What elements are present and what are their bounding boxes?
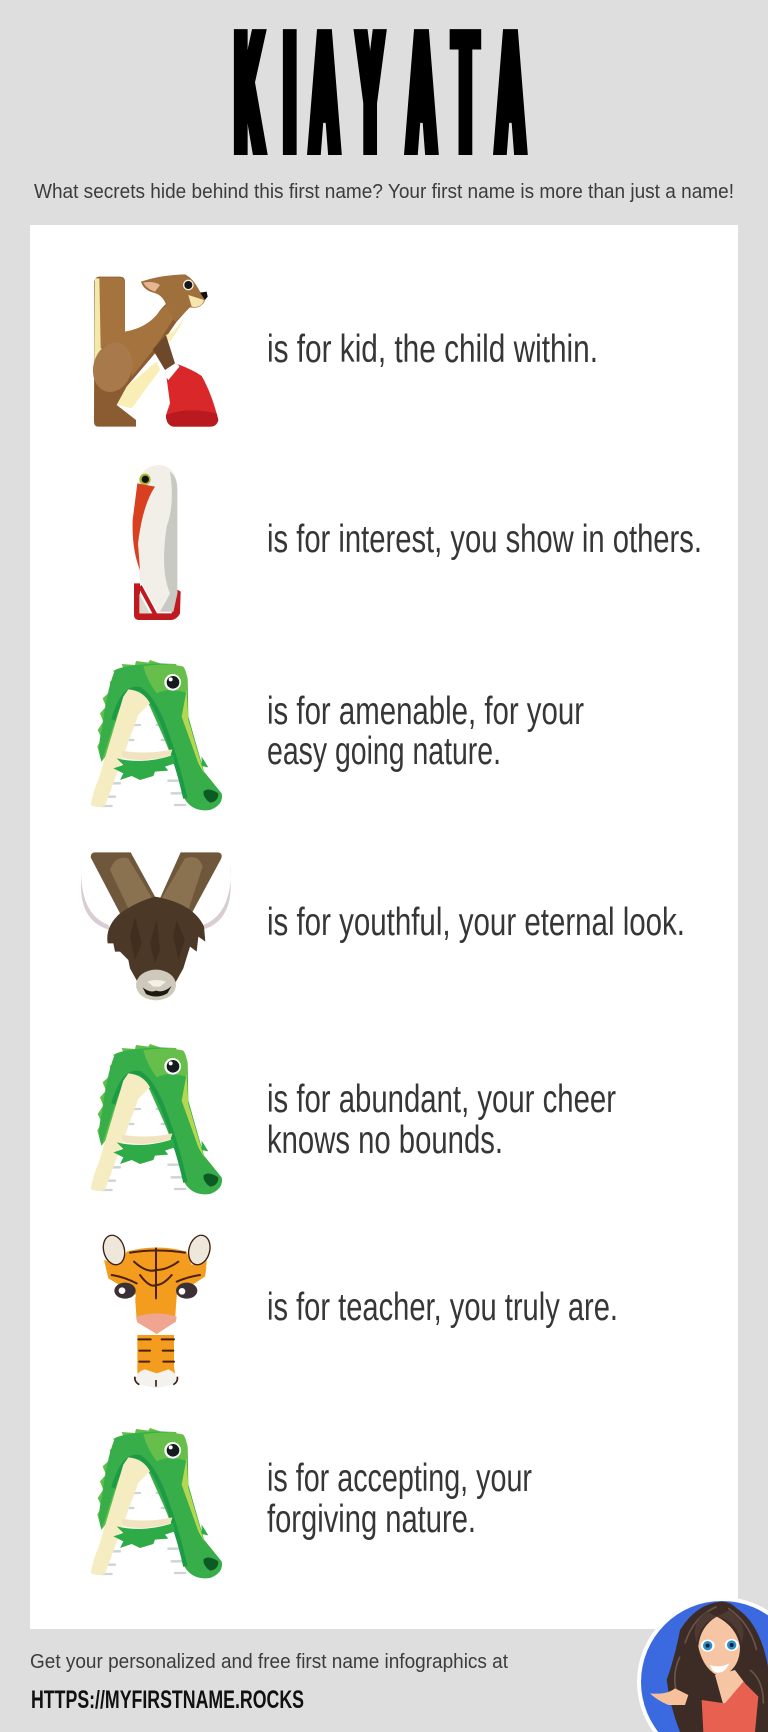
subtitle: What secrets hide behind this first name? Your first name is more than just a name!: [34, 181, 734, 203]
text: A amenable: easy going nature.: [267, 730, 501, 773]
text: A amenable: is for amenable, for your: [267, 690, 584, 733]
footer url: HTTPS://MYFIRSTNAME.ROCKS: [31, 1686, 304, 1714]
text: A accepting: [267, 1457, 532, 1541]
text: T: is for teacher, you truly are.: [267, 1286, 618, 1329]
icon: crocodile letter A: [91, 660, 222, 810]
icon: yak letter Y: [81, 852, 231, 1000]
footer text: Get your personalized and free first name infographics at: [30, 1651, 508, 1673]
icon: crocodile letter A: [91, 1428, 222, 1578]
text: A abundant: knows no bounds.: [267, 1119, 503, 1162]
text: A amenable: [267, 690, 584, 773]
avatar: [637, 1597, 768, 1732]
panel: letter list: [30, 225, 738, 1629]
text: A abundant: [267, 1078, 616, 1162]
icon: tiger letter T: [100, 1233, 213, 1388]
icon: crocodile letter A: [91, 1044, 222, 1194]
text: A abundant: is for abundant, your cheer: [267, 1078, 616, 1121]
text: A accepting: forgiving nature.: [267, 1498, 476, 1541]
icon: ibis letter I: [133, 465, 181, 620]
text: A accepting: is for accepting, your: [267, 1457, 532, 1500]
text: K: is for kid, the child within.: [267, 328, 598, 371]
icon: kangaroo letter K: [88, 274, 218, 427]
